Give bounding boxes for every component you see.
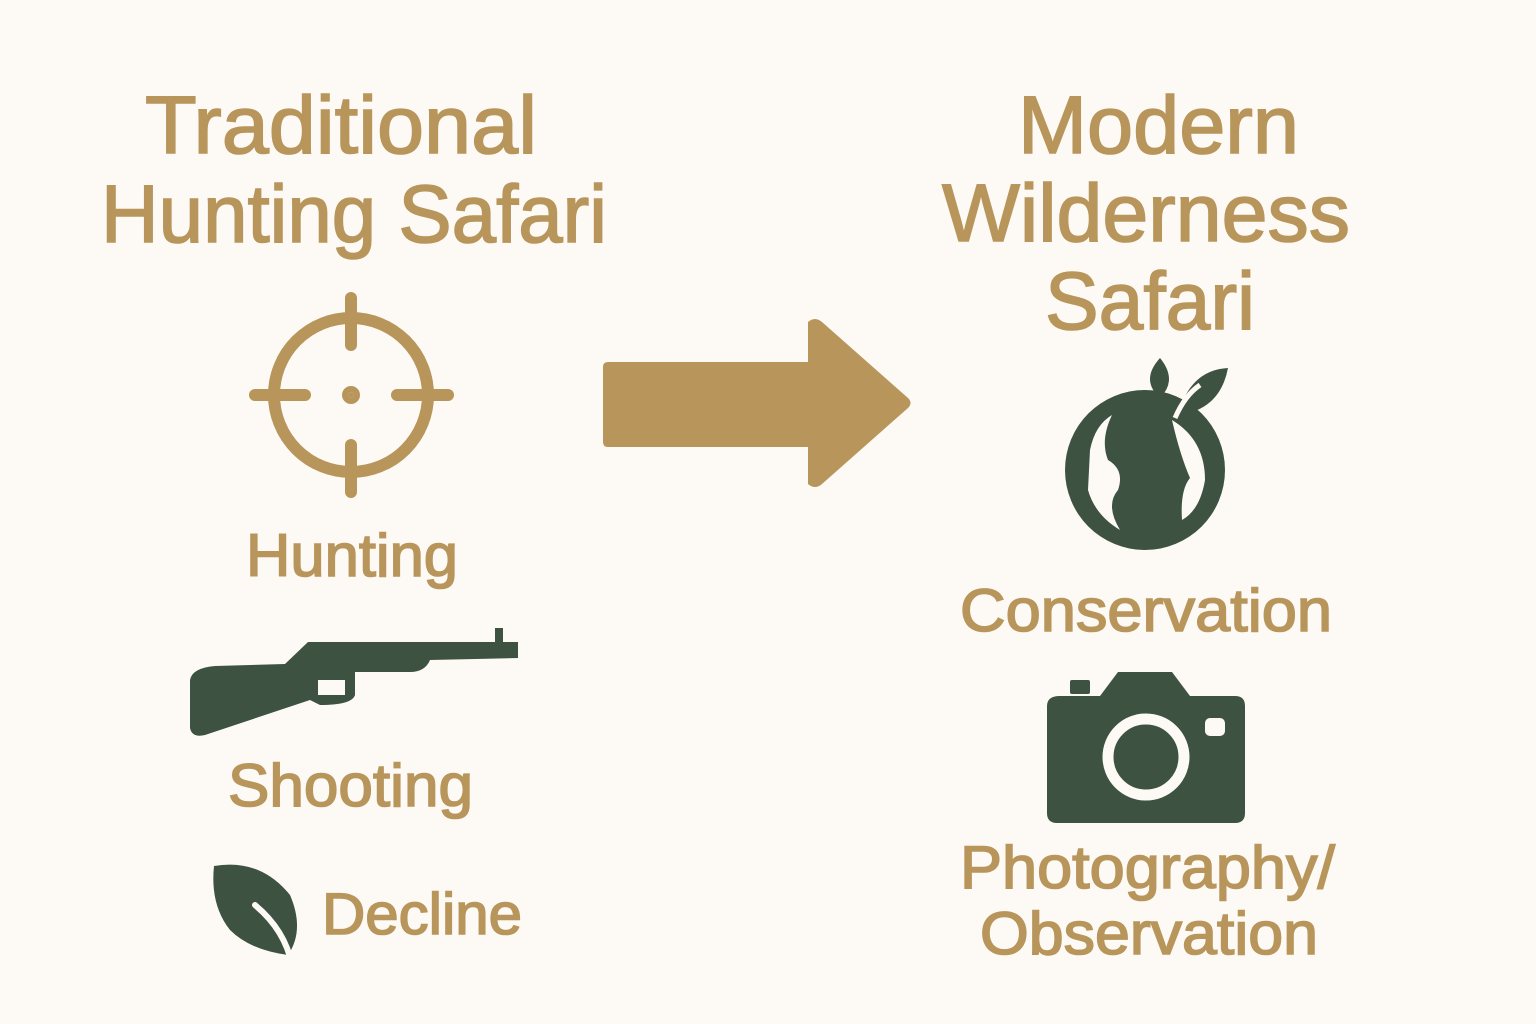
label: photography/observation: Observation [980, 900, 1318, 967]
title: traditional hunting safari: Traditional [145, 80, 537, 171]
title: traditional hunting safari: Hunting Safari [101, 169, 607, 260]
title: modern wilderness safari: Wilderness [942, 168, 1350, 259]
title: traditional hunting safari [101, 80, 607, 260]
label: decline: Decline [322, 882, 522, 947]
icon: camera [1047, 672, 1245, 823]
label: shooting: Shooting [228, 752, 473, 819]
label: photography/observation [960, 834, 1335, 967]
title: modern wilderness safari: Modern [1018, 80, 1299, 171]
icon: globe with leaves [1065, 358, 1228, 550]
label: conservation: Conservation [960, 577, 1332, 644]
label: photography/observation: Photography/ [960, 834, 1335, 901]
icon: rifle [190, 628, 518, 736]
arrow [603, 319, 910, 487]
label: hunting: Hunting [246, 522, 458, 589]
icon: leaf [213, 865, 297, 965]
title: modern wilderness safari: Safari [1045, 256, 1255, 347]
title: modern wilderness safari [942, 80, 1350, 347]
icon: crosshair [255, 298, 448, 492]
